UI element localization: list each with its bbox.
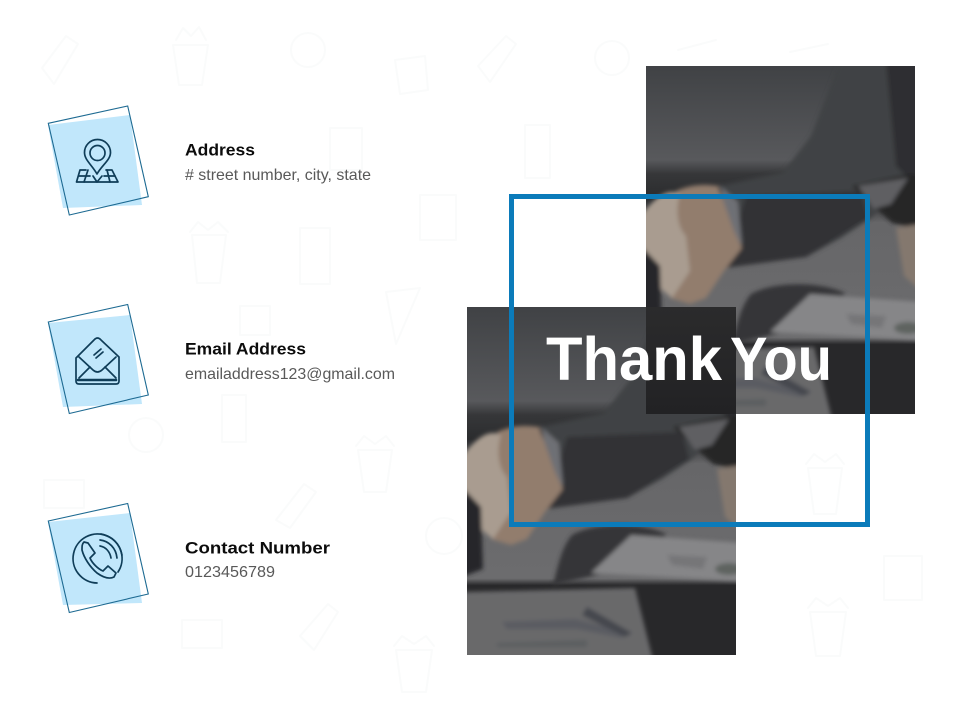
heading: email address: Email Address <box>185 340 306 358</box>
photo: handshake upper right <box>641 61 922 419</box>
heading: address: Address <box>185 142 255 160</box>
dark overlap panel <box>646 307 736 414</box>
title: Thank You <box>546 325 832 393</box>
blue square frame <box>512 196 868 524</box>
contact item: phone <box>48 504 331 612</box>
icon: open envelope on blue card <box>48 304 148 414</box>
title: Thank You: You <box>730 325 832 393</box>
icon: phone in circle on blue card <box>48 504 148 612</box>
photo: handshake lower left <box>462 302 743 660</box>
contact item: address <box>48 106 371 215</box>
title: Thank You: Thank <box>546 325 722 393</box>
contact item: email <box>48 304 395 414</box>
heading: contact number: Contact Number <box>185 540 331 558</box>
icon: map pin on blue card <box>48 106 148 215</box>
text: street: # street number, city, state <box>185 167 371 184</box>
text: phone number: 0123456789 <box>185 564 275 581</box>
text: email: emailaddress123@gmail.com <box>185 366 395 383</box>
